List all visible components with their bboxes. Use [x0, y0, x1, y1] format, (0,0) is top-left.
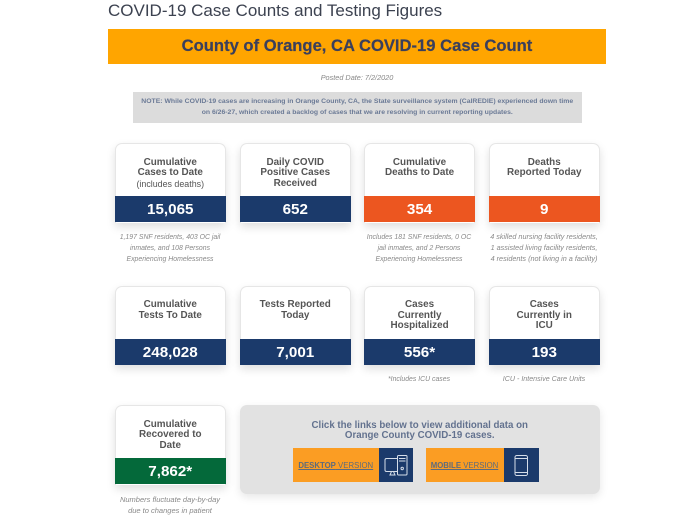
card title	[138, 299, 202, 320]
note: cases breakdown: Experiencing Homelessness	[127, 256, 213, 262]
card title: Cumulative	[144, 156, 197, 168]
note: cases breakdown: inmates, and 108 Persons	[130, 244, 210, 252]
note: ICU: ICU - Intensive Care Units	[503, 374, 585, 382]
note: cases breakdown: 1,197 SNF residents, 403 OC jail	[120, 234, 220, 240]
hospitalized value	[364, 339, 475, 365]
card title: Hospitalized	[390, 320, 449, 331]
panel text	[312, 420, 528, 441]
card title	[516, 299, 572, 331]
card title: Cumulative	[144, 299, 197, 310]
card title: Cases	[530, 299, 559, 310]
note: recovered: Numbers fluctuate day-by-day	[120, 495, 220, 504]
note box: NOTE: While COVID-19 cases are increasing in Orange County, CA, the State surveillance system (CalREDIE) experienced down time	[141, 98, 573, 105]
tests today value	[240, 339, 350, 365]
posted date: Posted Date: 7/2/2020	[321, 72, 393, 82]
mobile version link: MOBILE VERSION	[431, 461, 498, 470]
tests value	[115, 339, 226, 365]
card: recovered	[115, 405, 226, 484]
note: deaths today breakdown: 1 assisted living facility residents,	[491, 243, 597, 252]
card title	[385, 156, 454, 178]
deaths today value: 9	[540, 201, 548, 218]
hospitalized value: 556*	[404, 344, 435, 361]
card title: ICU	[536, 320, 553, 331]
tests value: 248,028	[143, 344, 198, 361]
panel text: Orange County COVID-19 cases.	[345, 430, 495, 441]
card title: Cumulative	[144, 418, 197, 430]
card title: Cases to Date	[138, 167, 203, 178]
deaths value	[364, 196, 475, 222]
card: cumulative deaths	[364, 143, 475, 222]
card: ICU	[489, 286, 600, 365]
card: cumulative tests	[115, 286, 226, 365]
note: deaths today breakdown: 4 residents (not living in a facility)	[491, 254, 597, 263]
note: recovered	[120, 495, 220, 515]
card: tests today	[240, 286, 350, 365]
icon: mobile phone	[504, 448, 539, 482]
deaths value: 354	[407, 201, 432, 218]
card title: Currently	[398, 310, 442, 320]
card title: Deaths to Date	[385, 167, 454, 178]
card: cumulative cases	[115, 143, 226, 222]
recovered value: 7,862*	[148, 463, 192, 480]
card title: Today	[281, 310, 309, 320]
note: hospitalized: *Includes ICU cases	[388, 376, 450, 382]
tests today value: 7,001	[276, 344, 314, 361]
note: deaths breakdown	[367, 234, 472, 262]
card title: Cases	[405, 299, 434, 310]
card title: Deaths	[528, 156, 561, 168]
ICU value: 193	[532, 344, 557, 361]
card title: Date	[160, 440, 181, 450]
panel text: Click the links below to view additional data on	[312, 420, 528, 430]
icon: desktop computer	[379, 448, 413, 482]
note: deaths breakdown: jail inmates, and 2 Persons	[378, 244, 460, 252]
note: deaths breakdown: Includes 181 SNF residents, 0 OC	[367, 234, 471, 240]
case count value	[115, 196, 226, 222]
note: recovered: due to changes in patient	[128, 506, 212, 515]
card title: Tests To Date	[139, 310, 202, 320]
card title	[507, 156, 582, 178]
card title: Reported Today	[507, 167, 581, 178]
card title	[260, 156, 330, 188]
note box: on 6/26-27, which created a backlog of cases that we are resolving in current reporting updates.	[202, 109, 513, 116]
card title: Tests Reported	[260, 299, 331, 310]
daily cases value	[240, 196, 350, 222]
card: daily positive cases	[240, 143, 350, 222]
orange banner heading: County of Orange, CA COVID-19 Case Count	[182, 36, 532, 55]
note: deaths today breakdown	[490, 232, 598, 263]
daily cases value: 652	[283, 201, 308, 218]
card: hospitalized	[364, 286, 475, 365]
desktop version link	[293, 448, 413, 482]
orange banner heading	[108, 29, 606, 64]
note: cases breakdown	[120, 234, 220, 262]
deaths today value	[489, 196, 600, 222]
card title	[136, 156, 204, 189]
ICU value	[489, 339, 600, 365]
card title: Daily COVID	[266, 156, 324, 168]
panel: additional data links	[240, 404, 600, 494]
card title	[260, 299, 331, 320]
card title: Cumulative	[393, 156, 446, 168]
desktop version link: DESKTOP VERSION	[298, 461, 373, 470]
mobile version link	[426, 448, 539, 482]
card title: Positive Cases	[260, 167, 330, 178]
recovered value	[115, 458, 226, 484]
note: deaths breakdown: Experiencing Homelessness	[376, 256, 462, 262]
card title	[390, 299, 449, 331]
card: deaths today	[489, 143, 600, 222]
card title: Currently in	[517, 310, 572, 320]
case count value: 15,065	[147, 201, 193, 218]
note: deaths today breakdown: 4 skilled nursing facility residents,	[490, 232, 598, 241]
card title: (includes deaths)	[136, 178, 204, 188]
card title	[139, 418, 202, 450]
note box	[133, 92, 582, 122]
card title: Recovered to	[139, 429, 202, 440]
page title: COVID-19 Case Counts and Testing Figures	[108, 1, 442, 20]
card title: Received	[274, 178, 317, 188]
